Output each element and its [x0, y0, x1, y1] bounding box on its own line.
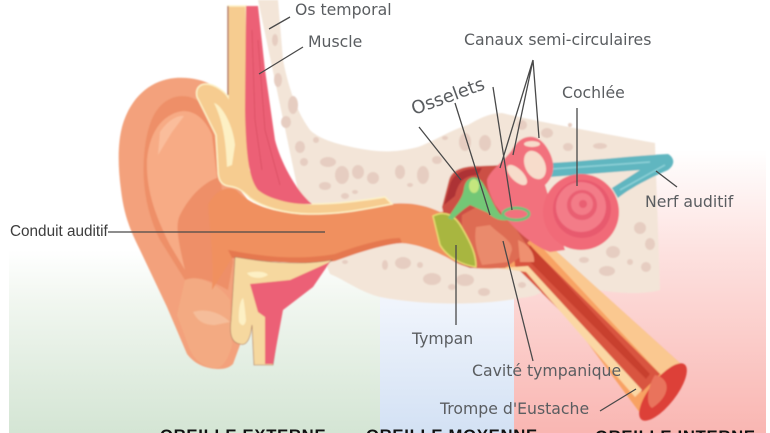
- label: Nerf auditif: Nerf auditif: [645, 192, 734, 211]
- label: Muscle: Muscle: [308, 32, 362, 51]
- label: Cavité tympanique: Cavité tympanique: [472, 361, 621, 380]
- background zone: outer ear: [9, 250, 380, 433]
- ossicles: [448, 177, 512, 220]
- semicircular canals: [487, 137, 565, 252]
- upper cartilage and skin: [197, 6, 392, 214]
- label: Muscle: [259, 32, 362, 74]
- label: Tympan: [411, 245, 473, 348]
- label: Trompe d'Eustache: [439, 389, 636, 418]
- cochlea: [543, 174, 619, 250]
- label: Cochlée: [562, 83, 625, 186]
- middle ear cavity: [442, 165, 530, 268]
- ear canal: [208, 189, 530, 290]
- label: Os temporal: Os temporal: [295, 0, 392, 19]
- label: Tympan: Tympan: [411, 329, 473, 348]
- label: Trompe d'Eustache: Trompe d'Eustache: [439, 399, 589, 418]
- temporal bone: [258, 0, 660, 304]
- background zone: middle ear: [380, 285, 514, 433]
- label: Osselets: [409, 74, 512, 215]
- label: Cochlée: Cochlée: [562, 83, 625, 102]
- label: Os temporal: [269, 0, 392, 29]
- label: Cavité tympanique: [472, 241, 621, 380]
- label: Canaux semi-circulaires: Canaux semi-circulaires: [464, 30, 651, 49]
- auditory nerve: [550, 154, 673, 198]
- lower muscle: [250, 262, 330, 364]
- background zone: inner ear: [514, 150, 766, 433]
- label: Canaux semi-circulaires: [464, 30, 651, 168]
- ear illustration: [119, 0, 695, 428]
- bone pores: [272, 34, 655, 296]
- label: Osselets: Osselets: [409, 74, 488, 120]
- label: Conduit auditif: Conduit auditif: [10, 223, 109, 240]
- label: Nerf auditif: [645, 171, 734, 211]
- eardrum: [433, 213, 476, 267]
- pinna: [119, 78, 280, 369]
- muscle: [245, 6, 312, 204]
- Eustachian tube: [495, 230, 682, 417]
- lower cartilage: [230, 257, 332, 365]
